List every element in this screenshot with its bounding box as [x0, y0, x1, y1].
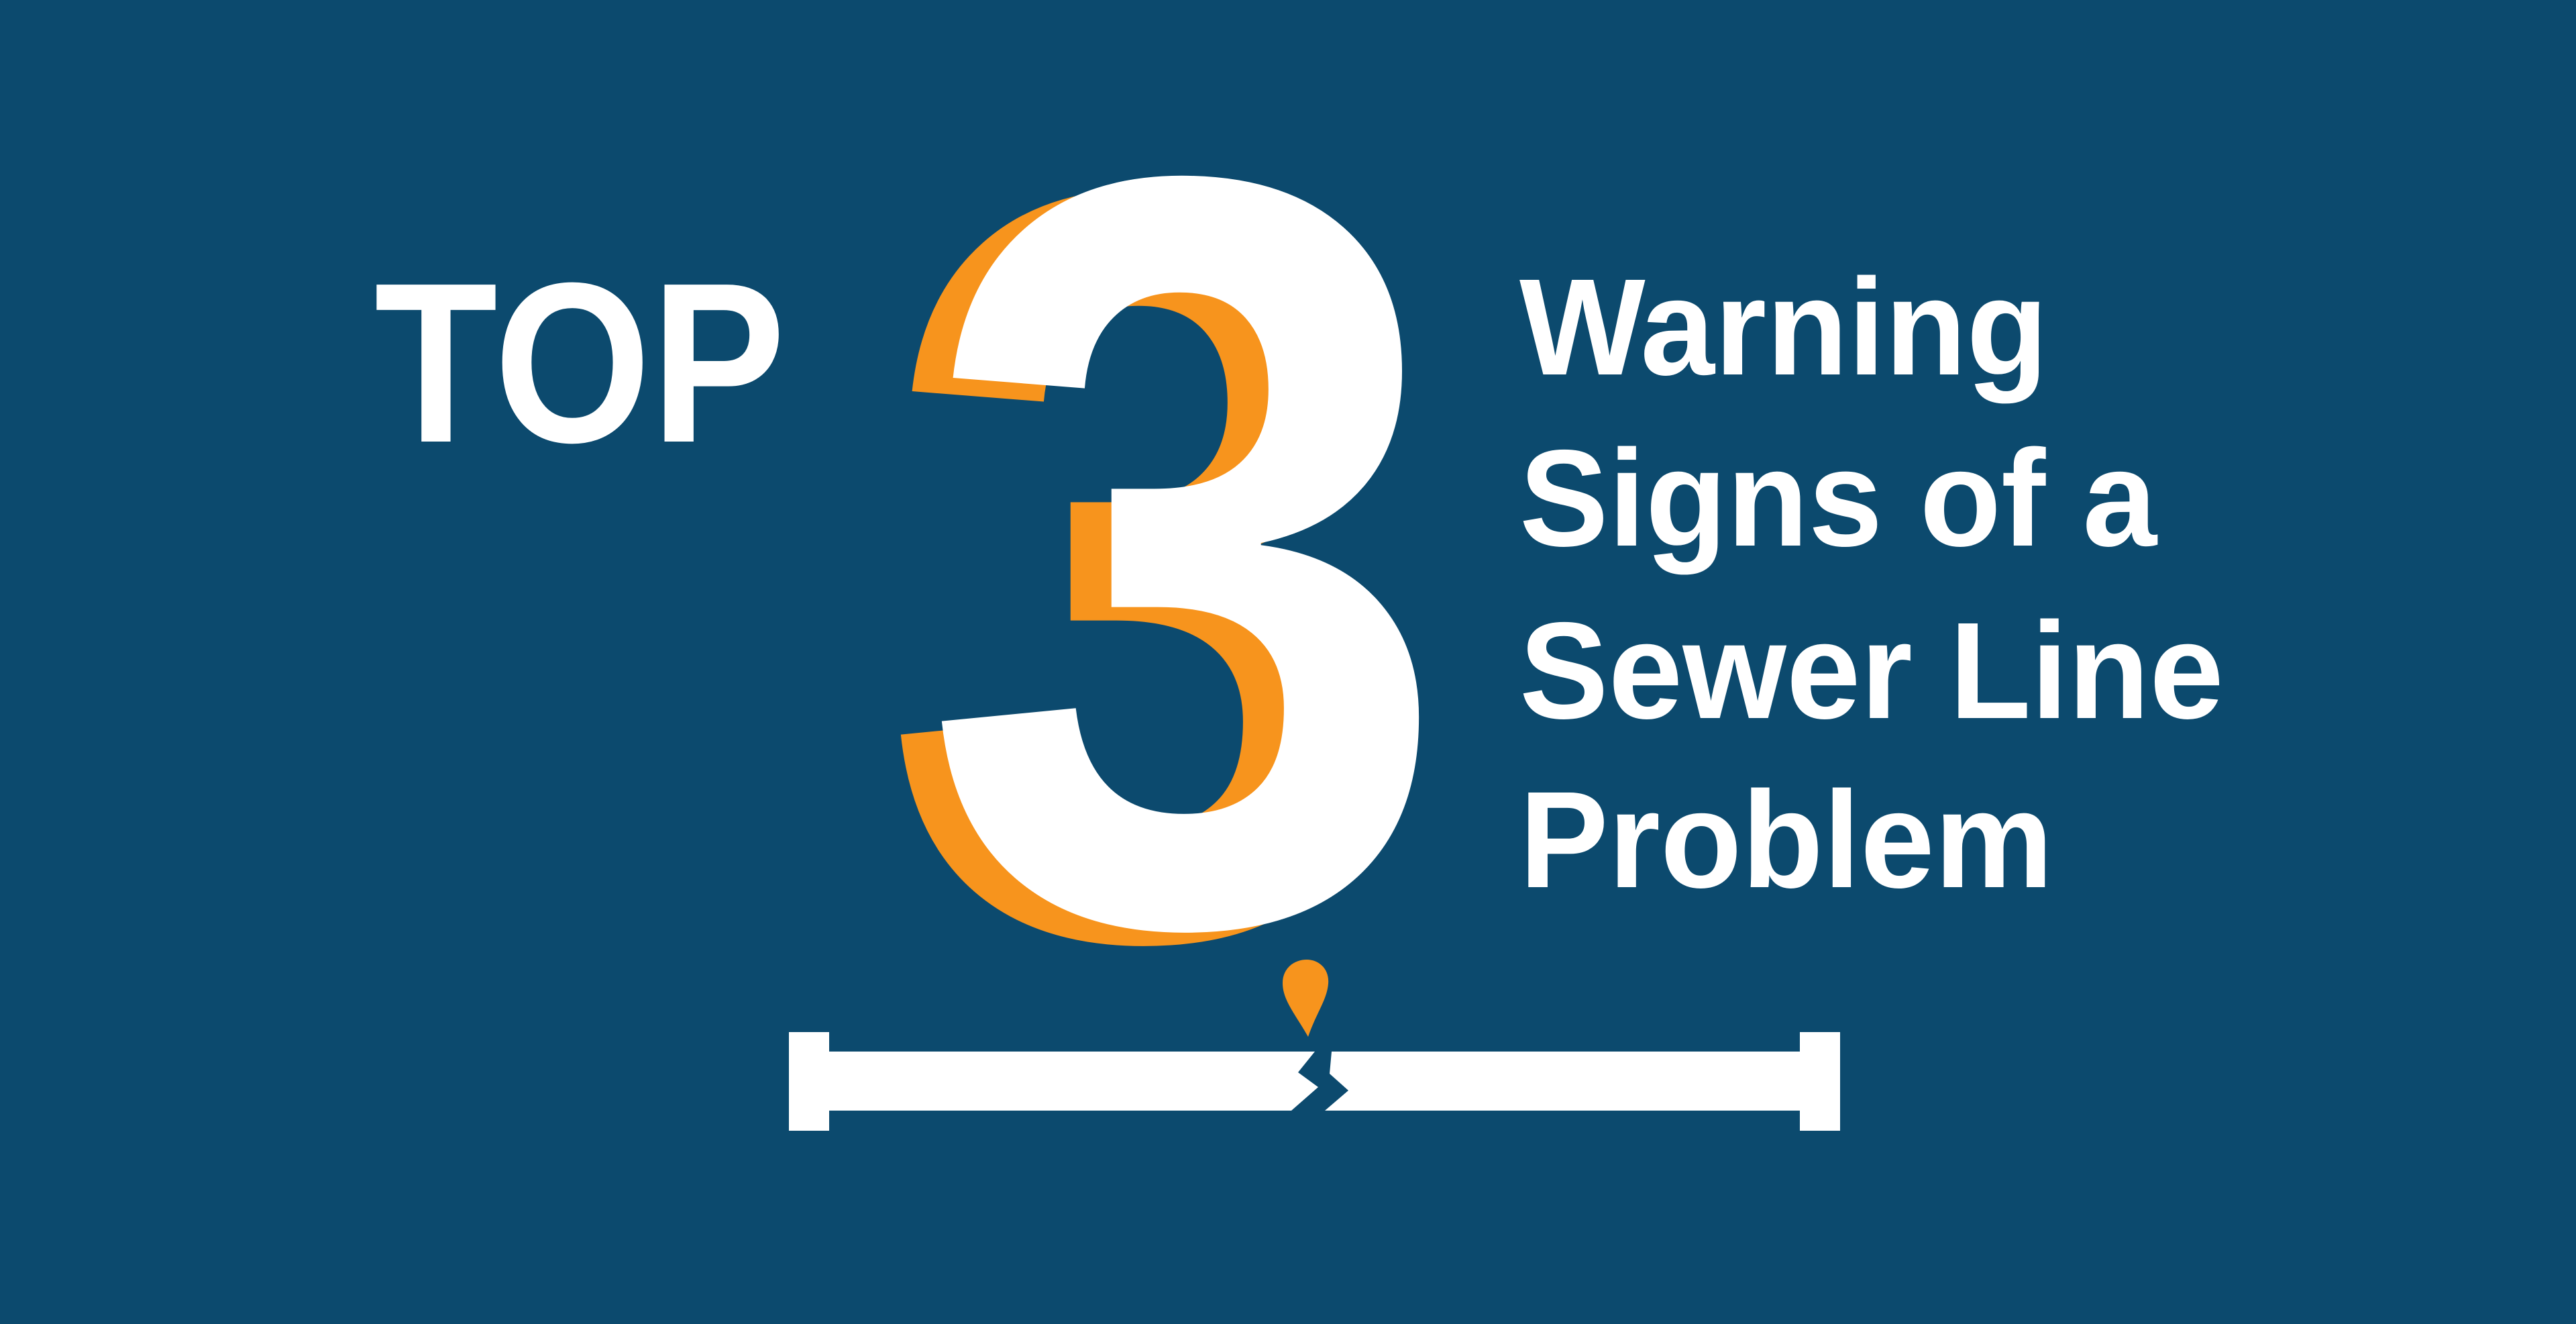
- subtitle text block: [1519, 250, 2224, 917]
- subtitle text block: Warning: [1519, 250, 2048, 404]
- subtitle text block: Sewer Line: [1519, 593, 2224, 748]
- icon: orange water drop: [1283, 960, 1328, 1037]
- heading: TOP: TOP: [374, 236, 786, 491]
- subtitle text block: Signs of a: [1519, 421, 2158, 575]
- icon: broken pipe: [789, 1032, 1840, 1131]
- big number 3 with orange shadow: 3: [879, 0, 1413, 1160]
- subtitle text block: Problem: [1519, 762, 2053, 917]
